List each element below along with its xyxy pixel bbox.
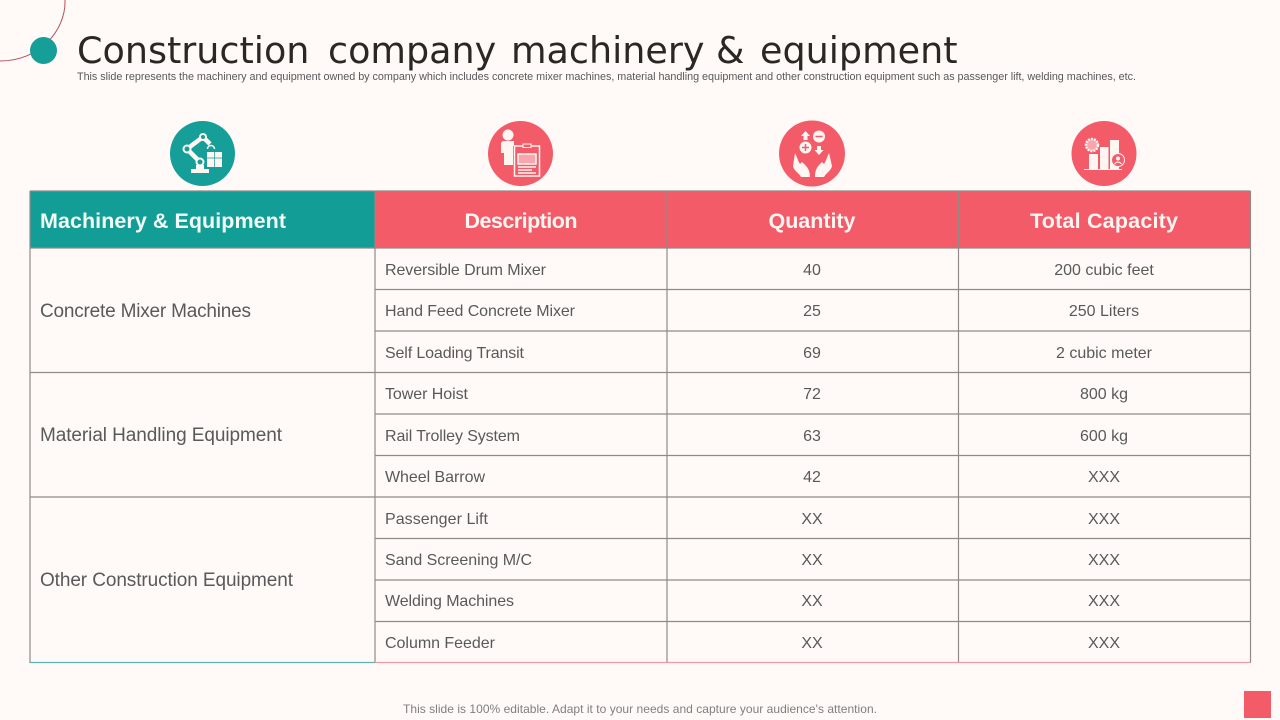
table xyxy=(30,191,1250,663)
row: column feeder xyxy=(385,635,1120,652)
row: hand feed concrete mixer xyxy=(385,303,1139,320)
row: wheel barrow: Wheel Barrow xyxy=(385,469,485,486)
icon: hands with plus and minus xyxy=(779,120,845,186)
row: passenger lift: XXX xyxy=(1088,511,1120,528)
row: passenger lift: Passenger Lift xyxy=(385,511,489,528)
icon: robotic arm xyxy=(170,121,235,186)
row: reversible drum mixer: Reversible Drum Mixer xyxy=(385,262,547,279)
table header: description: Description xyxy=(464,209,578,233)
row: rail trolley system xyxy=(385,428,1128,445)
table header: quantity xyxy=(667,191,958,248)
title: equipment xyxy=(760,29,958,72)
row: welding machines xyxy=(385,593,1120,610)
title: machinery xyxy=(511,29,704,72)
row: wheel barrow xyxy=(385,469,1120,486)
table header: machinery and equipment xyxy=(30,191,375,248)
row: hand feed concrete mixer: 250 Liters xyxy=(1069,303,1139,320)
row: passenger lift xyxy=(385,511,1120,528)
row: sand screening m/c: Sand Screening M/C xyxy=(385,552,532,569)
category: other construction equipment: Other Construction Equipment xyxy=(40,570,294,591)
title: & xyxy=(716,29,744,72)
row: column feeder: XXX xyxy=(1088,635,1120,652)
icon: bar chart with gear and person xyxy=(1072,121,1136,186)
row: tower hoist xyxy=(385,386,1128,403)
row: sand screening m/c: XXX xyxy=(1088,552,1120,569)
row: rail trolley system: 600 kg xyxy=(1080,428,1128,445)
corner square xyxy=(1244,691,1271,718)
icon: person with clipboard xyxy=(488,121,553,186)
row: rail trolley system: Rail Trolley System xyxy=(385,428,520,445)
row: tower hoist: Tower Hoist xyxy=(385,386,469,403)
row: welding machines: Welding Machines xyxy=(385,593,514,610)
title: Construction xyxy=(77,29,309,72)
row: column feeder: XX xyxy=(801,635,823,652)
row: self loading transit xyxy=(385,345,1153,362)
row: self loading transit: 2 cubic meter xyxy=(1056,345,1153,362)
row: wheel barrow: 42 xyxy=(803,469,821,486)
table bottom rule xyxy=(30,662,1250,664)
row: hand feed concrete mixer: Hand Feed Concrete Mixer xyxy=(385,303,576,320)
table header: description xyxy=(375,191,667,248)
row: reversible drum mixer: 200 cubic feet xyxy=(1054,262,1154,279)
row: passenger lift: XX xyxy=(801,511,823,528)
row: tower hoist: 800 kg xyxy=(1080,386,1128,403)
row: reversible drum mixer xyxy=(385,262,1154,279)
row: hand feed concrete mixer: 25 xyxy=(803,303,821,320)
row: self loading transit: 69 xyxy=(803,345,821,362)
row: wheel barrow: XXX xyxy=(1088,469,1120,486)
footer note: This slide is 100% editable. Adapt it to your needs and capture your audience's attention. xyxy=(403,702,877,716)
row: self loading transit: Self Loading Transit xyxy=(385,345,525,362)
row: welding machines: XXX xyxy=(1088,593,1120,610)
table header: quantity: Quantity xyxy=(768,209,856,233)
decorative corner arc and teal dot xyxy=(0,0,65,64)
table header: total capacity xyxy=(958,191,1250,248)
title: company xyxy=(328,29,496,72)
table header: total capacity: Total Capacity xyxy=(1030,209,1178,233)
row: sand screening m/c xyxy=(385,552,1120,569)
row: reversible drum mixer: 40 xyxy=(803,262,821,279)
category: material handling equipment: Material Handling Equipment xyxy=(40,425,283,446)
category: concrete mixer machines: Concrete Mixer Machines xyxy=(40,301,251,322)
table grid lines xyxy=(30,191,1250,663)
row: tower hoist: 72 xyxy=(803,386,821,403)
row: sand screening m/c: XX xyxy=(801,552,823,569)
subtitle: This slide represents the machinery and equipment owned by company which includes concrete mixer machines, material handling equipment and other construction equipment such as passenger lift, welding machines, etc. xyxy=(77,71,1136,83)
row: rail trolley system: 63 xyxy=(803,428,821,445)
row: welding machines: XX xyxy=(801,593,823,610)
row: column feeder: Column Feeder xyxy=(385,635,496,652)
table header: machinery and equipment: Machinery & Equipment xyxy=(40,209,286,233)
